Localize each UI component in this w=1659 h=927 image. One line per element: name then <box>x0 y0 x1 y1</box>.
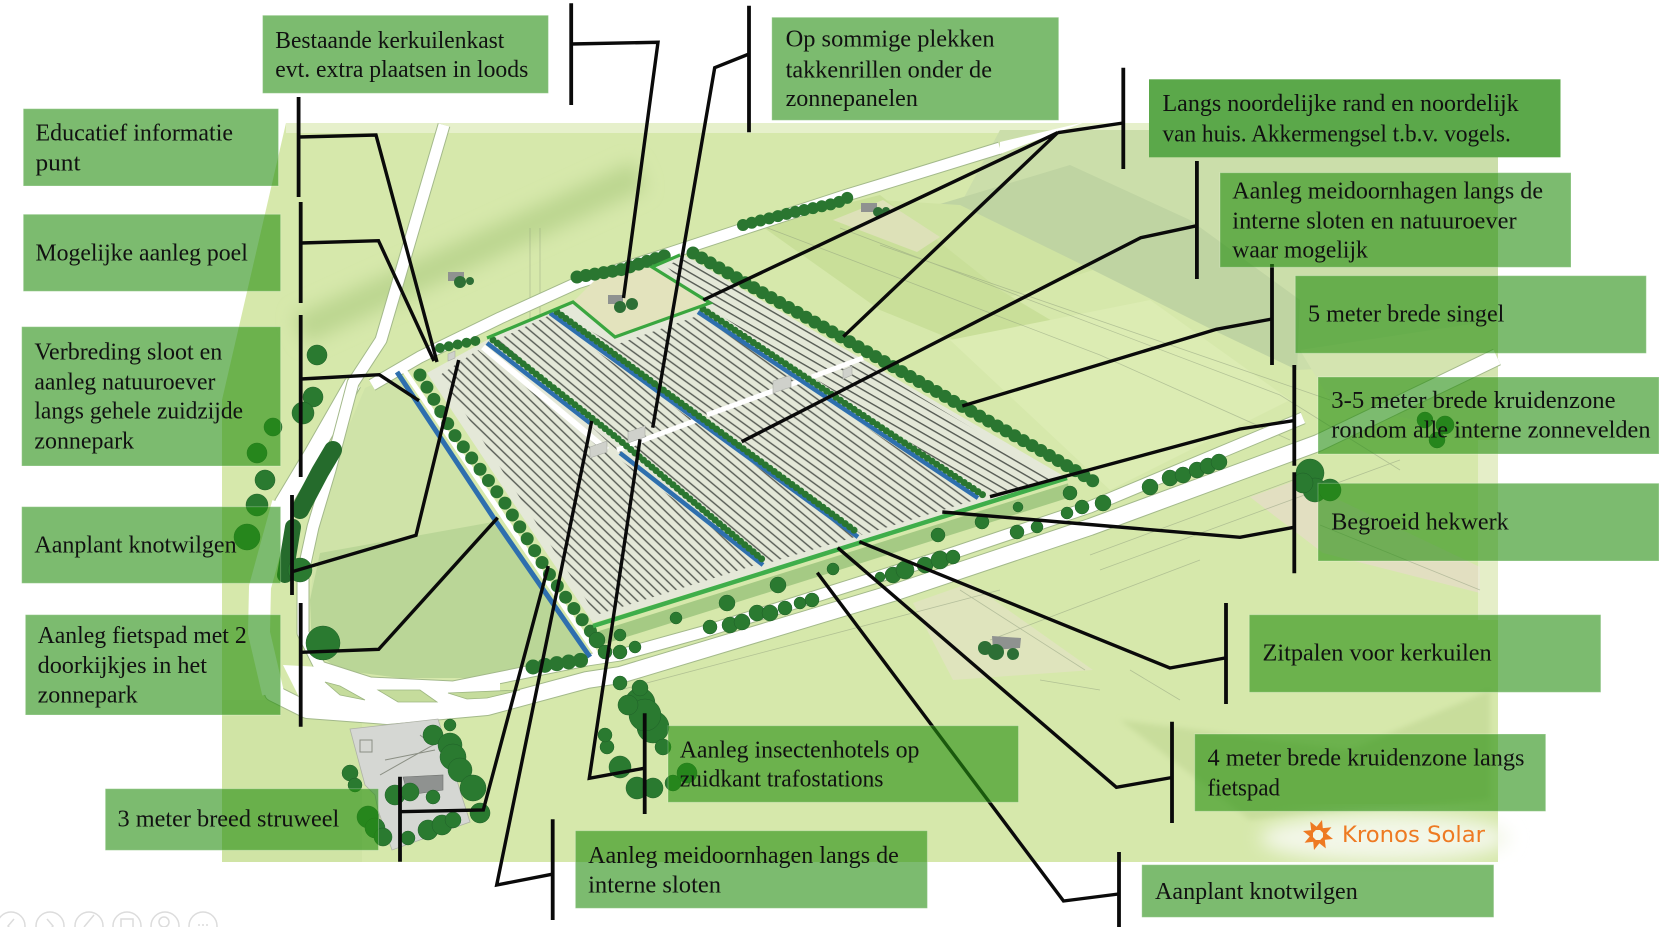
label: Aanleg meidoornhagen en natuuroever <box>1220 173 1571 267</box>
green fence <box>487 255 710 338</box>
label: Aanplant knotwilgen rechts: Aanplant knotwilgen <box>1155 879 1358 905</box>
leader: 5 meter brede singel <box>962 264 1272 406</box>
label: Educatief informatie punt <box>23 109 278 186</box>
label: Aanleg fietspad: zonnepark <box>38 682 138 708</box>
road: north <box>372 122 1085 385</box>
label: Aanleg meidoornhagen langs de interne sloten: interne sloten <box>588 873 721 899</box>
kruidenzone strip <box>600 490 1070 638</box>
farm: central kerkuilenkast <box>608 295 638 313</box>
label: Aanleg insectenhotels <box>668 726 1018 802</box>
leader: Op sommige plekken <box>653 6 749 428</box>
label: Op sommige plekken: Op sommige plekken <box>786 27 995 53</box>
leader: Educatief informatie punt <box>299 97 437 362</box>
label: Verbreding sloot: langs gehele zuidzijde <box>34 399 243 425</box>
label: Aanleg insectenhotels: zuidkant trafostations <box>680 767 884 793</box>
begroeid hekwerk <box>593 478 1067 626</box>
label: Educatief informatie punt: Educatief informatie <box>36 121 233 147</box>
transformer stations <box>448 351 852 458</box>
solar field C <box>563 315 975 535</box>
leader: Aanleg fietspad <box>301 518 498 727</box>
label: Langs noordelijke rand: van huis. Akkermengsel t.b.v. vogels. <box>1162 121 1511 147</box>
leader: 4 meter brede kruidenzone <box>838 548 1172 823</box>
label: Zitpalen voor kerkuilen <box>1249 615 1601 692</box>
map colour bands <box>222 123 1510 862</box>
leader: Mogelijke aanleg poel <box>301 202 434 361</box>
label: Bestaande kerkuilenkast <box>263 15 548 93</box>
label: Mogelijke aanleg poel <box>23 214 281 291</box>
label: Mogelijke aanleg poel: Mogelijke aanleg poel <box>36 241 248 267</box>
hedges along ditches <box>285 195 1100 667</box>
solar park base <box>427 253 1067 623</box>
label: Zitpalen voor kerkuilen: Zitpalen voor kerkuilen <box>1262 641 1492 667</box>
label: Verbreding sloot: aanleg natuuroever <box>34 369 215 395</box>
trees <box>234 345 1454 799</box>
farm: small northwest <box>448 272 474 288</box>
label: Aanplant knotwilgen rechts <box>1142 865 1494 917</box>
label: 3-5 meter brede kruidenzone <box>1318 377 1659 454</box>
label: Aanplant knotwilgen links: Aanplant knotwilgen <box>34 532 237 558</box>
label: Begroeid hekwerk <box>1318 483 1659 561</box>
label: Langs noordelijke rand <box>1149 79 1560 157</box>
leader: Langs noordelijke rand <box>703 68 1123 337</box>
label: Aanleg fietspad: doorkijkjes in het <box>38 653 207 679</box>
label: 4 meter brede kruidenzone: 4 meter brede kruidenzone langs <box>1208 746 1524 772</box>
logo: Kronos Solar <box>1303 820 1486 850</box>
label: Aanleg meidoornhagen en natuuroever: interne sloten en natuuroever <box>1232 208 1517 234</box>
label: Aanleg meidoornhagen en natuuroever: waar mogelijk <box>1232 237 1368 263</box>
label: 3-5 meter brede kruidenzone: 3-5 meter brede kruidenzone <box>1331 388 1616 414</box>
logo icon <box>1303 820 1333 850</box>
leader: Aanplant knotwilgen links <box>292 360 459 595</box>
label: 3-5 meter brede kruidenzone: rondom alle interne zonnevelden <box>1331 418 1650 444</box>
bottom farm building <box>403 775 443 795</box>
label: 3 meter breed struweel: 3 meter breed struweel <box>118 807 340 833</box>
road islands <box>325 682 520 702</box>
parking yard <box>350 719 470 850</box>
leader: Aanleg meidoornhagen onder <box>497 421 592 920</box>
solar field B <box>497 316 855 563</box>
loop field inside fietspad <box>310 373 590 678</box>
label: 5 meter brede singel <box>1295 276 1646 353</box>
label: Aanleg meidoornhagen en natuuroever: Aanleg meidoornhagen langs de <box>1232 178 1543 204</box>
leader: 3-5 meter brede kruidenzone <box>990 365 1294 497</box>
label: Aanleg meidoornhagen langs de interne sloten <box>575 831 927 908</box>
label: Bestaande kerkuilenkast: evt. extra plaatsen in loods <box>275 57 528 83</box>
label: Verbreding sloot: Verbreding sloot en <box>34 339 222 365</box>
leader: Aanleg meidoornhagen rechts <box>742 161 1197 442</box>
label: Aanplant knotwilgen links <box>22 507 281 583</box>
label: Aanleg fietspad <box>25 615 281 715</box>
leader: Begroeid hekwerk <box>942 472 1294 573</box>
leader: Verbreding sloot <box>301 315 419 477</box>
map: aerial site plan <box>222 122 1510 862</box>
label: Educatief informatie punt: punt <box>36 151 81 177</box>
parcel sketch lines <box>530 225 1480 700</box>
logo wordmark: Kronos Solar <box>1342 823 1486 848</box>
map ground <box>222 123 1498 862</box>
label: 3 meter breed struweel <box>105 789 379 850</box>
farmyard beside panels <box>573 267 710 337</box>
label: Aanleg fietspad: Aanleg fietspad met 2 <box>38 623 247 649</box>
label: Langs noordelijke rand: Langs noordelijke rand en noordelijk <box>1162 91 1519 117</box>
farm: southeast <box>978 636 1021 660</box>
loop field lower tone <box>310 522 590 678</box>
label: 4 meter brede kruidenzone: fietspad <box>1208 776 1280 802</box>
label: Begroeid hekwerk: Begroeid hekwerk <box>1331 510 1509 536</box>
leader: Aanplant knotwilgen rechts <box>817 573 1119 927</box>
label: 4 meter brede kruidenzone <box>1195 734 1546 811</box>
leader: Bestaande kerkuilenkast <box>571 3 658 298</box>
label: 5 meter brede singel: 5 meter brede singel <box>1308 302 1505 328</box>
label: Aanleg meidoornhagen langs de interne sloten: Aanleg meidoornhagen langs de <box>588 843 899 869</box>
leader: Zitpalen voor kerkuilen <box>859 542 1226 704</box>
label: Aanleg insectenhotels: Aanleg insectenhotels op <box>680 737 920 763</box>
white cross path <box>404 347 863 655</box>
yard parking outlines <box>360 735 435 775</box>
label: Op sommige plekken: zonnepanelen <box>786 86 918 112</box>
solar field A <box>440 350 762 615</box>
solar field D <box>665 258 1055 495</box>
farm: northeast <box>861 203 890 217</box>
label: Op sommige plekken: takkenrillen onder de <box>786 57 992 83</box>
label: Verbreding sloot <box>22 327 281 466</box>
leader: Aanleg insectenhotels <box>589 439 645 814</box>
bottom farm trees <box>357 719 490 846</box>
leader lines <box>292 3 1294 927</box>
label: Op sommige plekken <box>772 17 1059 120</box>
label: Bestaande kerkuilenkast: Bestaande kerkuilenkast <box>275 28 505 54</box>
blue ditches <box>397 312 978 657</box>
label: Verbreding sloot: zonnepark <box>34 428 134 454</box>
road: outer fietspad ring <box>259 357 1497 716</box>
slideshow toolbar icons <box>0 912 217 927</box>
road: inner track <box>303 125 1303 687</box>
road junction fill <box>283 665 500 715</box>
leader: 3 meter breed struweel <box>400 566 548 862</box>
